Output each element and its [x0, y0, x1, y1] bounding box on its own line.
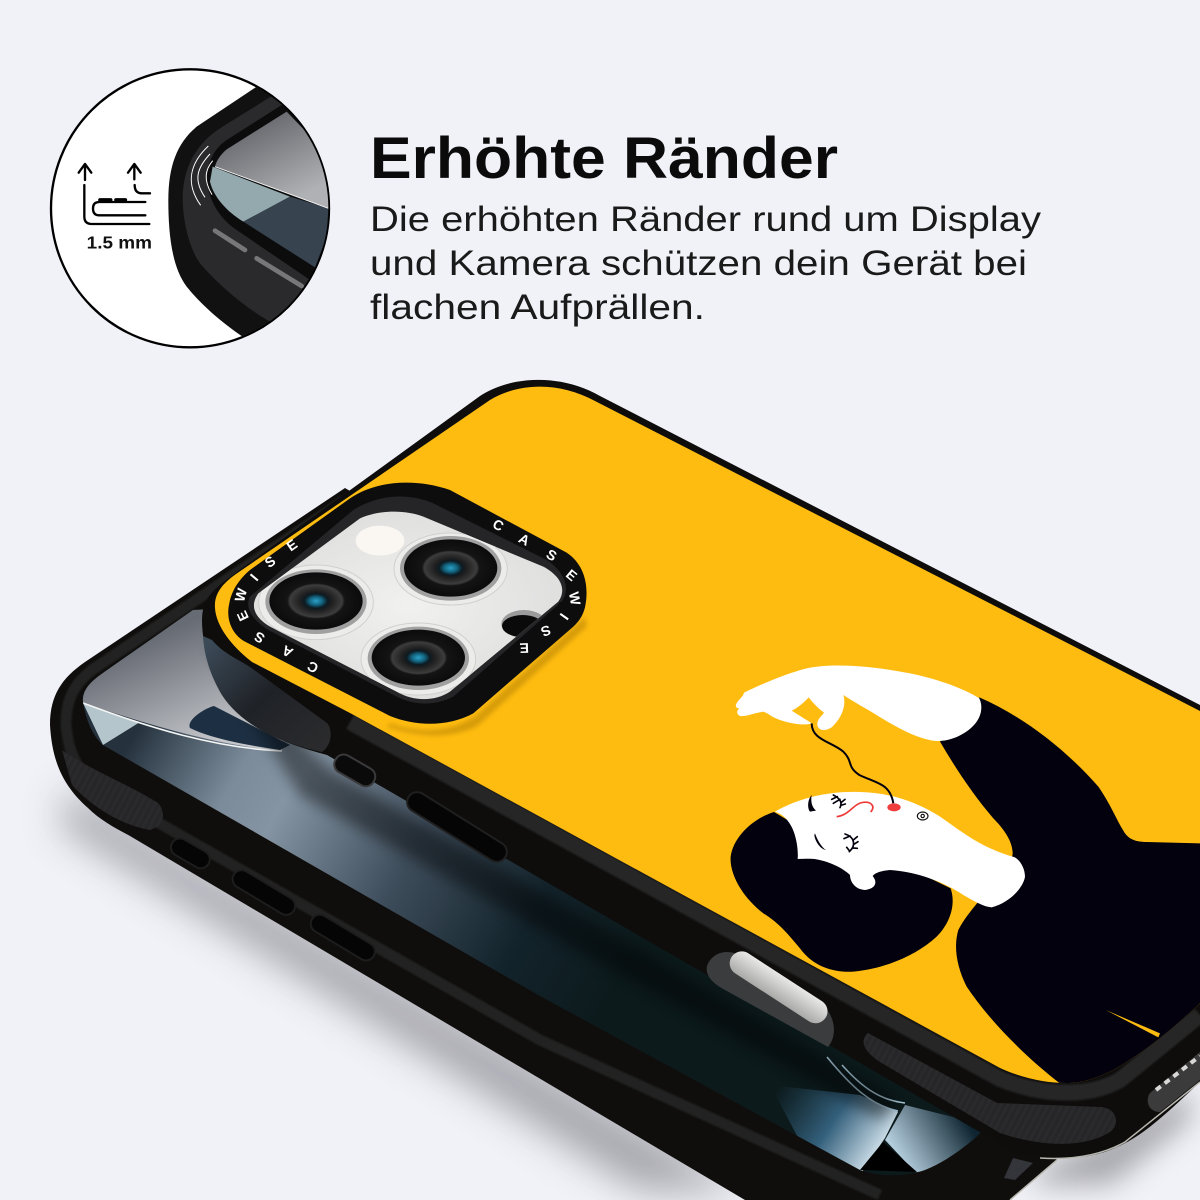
wallpaper upper grey: [82, 610, 284, 750]
back phone rim highlight: [66, 500, 880, 1195]
front phone corner patch: [203, 636, 331, 752]
CASEWISE lettering: W: [231, 586, 250, 603]
eyebrows and eyelids: [808, 795, 826, 850]
description text: [370, 199, 1041, 327]
CASEWISE lettering: E: [563, 566, 580, 584]
CASEWISE lettering: I: [247, 571, 261, 584]
lower light display reflection: [210, 167, 290, 222]
bottom corner carbon patch: [864, 1033, 1116, 1144]
description text: und Kamera schützen dein Gerät bei: [370, 243, 1027, 283]
CASEWISE lettering: E: [233, 608, 252, 624]
front phone: yellow back side: [202, 380, 1200, 1158]
CASEWISE lettering: E: [283, 536, 300, 554]
back phone display: [82, 610, 981, 1175]
upper display reflection: [215, 112, 333, 208]
heading: Erhöhte Ränder: [370, 126, 838, 191]
back phone corner carbon patch: [62, 750, 163, 830]
back phone edge light line: [1010, 1160, 1057, 1200]
lens 3: [361, 623, 476, 695]
CASEWISE lettering: W: [566, 590, 584, 607]
spiral ear: [917, 812, 928, 820]
close-up of phone case corner: [168, 80, 340, 338]
camera ring shadow: [387, 617, 587, 735]
lens 2: [394, 533, 507, 605]
red nose dot: [887, 803, 901, 811]
impact arcs: [191, 146, 213, 205]
bottom grille: [1148, 1052, 1200, 1112]
display bottom black triangle: [860, 1142, 917, 1172]
camera ring: [228, 483, 587, 724]
CASEWISE lettering: S: [251, 628, 267, 647]
CASEWISE lettering: C: [304, 658, 321, 677]
volume up button: [229, 867, 298, 918]
front phone shadow on display: [205, 640, 900, 1120]
charging port button: [707, 947, 834, 1047]
back phone: display side: [50, 488, 1060, 1200]
face and neck: [775, 792, 1025, 907]
front phone buttons: [331, 751, 511, 866]
back phone bumper: [50, 488, 1057, 1200]
CASEWISE lettering: S: [544, 546, 560, 564]
camera plateau: [254, 512, 562, 699]
shadow at lower right: [1030, 1090, 1190, 1185]
icon: raised edge diagram: [79, 164, 150, 224]
mute button: [168, 835, 213, 872]
back phone buttons: [168, 835, 378, 964]
circular detail: raised edge close-up: [51, 69, 340, 347]
yellow back panel: [215, 387, 1200, 1083]
dress slit: [1106, 1010, 1160, 1037]
camera module: [228, 483, 587, 735]
dark display wedge: [243, 197, 328, 267]
CASEWISE lettering: E: [519, 640, 529, 656]
arm and hand: [736, 666, 981, 741]
wallpaper pale band: [83, 703, 140, 745]
description text: flachen Aufprällen.: [370, 287, 705, 327]
side button: [403, 788, 511, 866]
hair: [731, 812, 953, 972]
red mouth: [837, 802, 873, 817]
camera ring inner wall: [248, 497, 566, 704]
CASEWISE lettering: [231, 516, 584, 677]
front bumper highlight band: [350, 722, 1200, 1093]
LiDAR sensor: [501, 610, 542, 637]
CASEWISE lettering: C: [490, 516, 507, 534]
front phone bumper: [202, 380, 1200, 1158]
description text: Die erhöhten Ränder rund um Display: [370, 199, 1041, 239]
shadow under back phone: [60, 790, 745, 1190]
display bottom blue wedge: [778, 1087, 898, 1171]
lens 1: [259, 565, 373, 640]
marionette string: [812, 723, 893, 803]
camera flash: [356, 526, 404, 556]
sweater: [940, 697, 1200, 1107]
CASEWISE lettering: S: [539, 622, 553, 640]
wallpaper swoosh: [189, 706, 290, 750]
back phone bottom grille: [1004, 1158, 1033, 1180]
silent switch: [331, 751, 379, 790]
volume down button: [307, 911, 378, 964]
illustration: woman with marionette string: [731, 666, 1200, 1107]
light edge line: [1040, 1082, 1200, 1158]
ring overlap at sensor: [523, 602, 570, 652]
CASEWISE lettering: A: [516, 530, 533, 549]
eyelashes: [832, 795, 858, 852]
CASEWISE lettering: A: [279, 642, 296, 661]
label: 1.5 mm: 1.5 mm: [87, 232, 152, 252]
CASEWISE lettering: S: [262, 552, 278, 571]
CASEWISE lettering: I: [557, 610, 572, 623]
